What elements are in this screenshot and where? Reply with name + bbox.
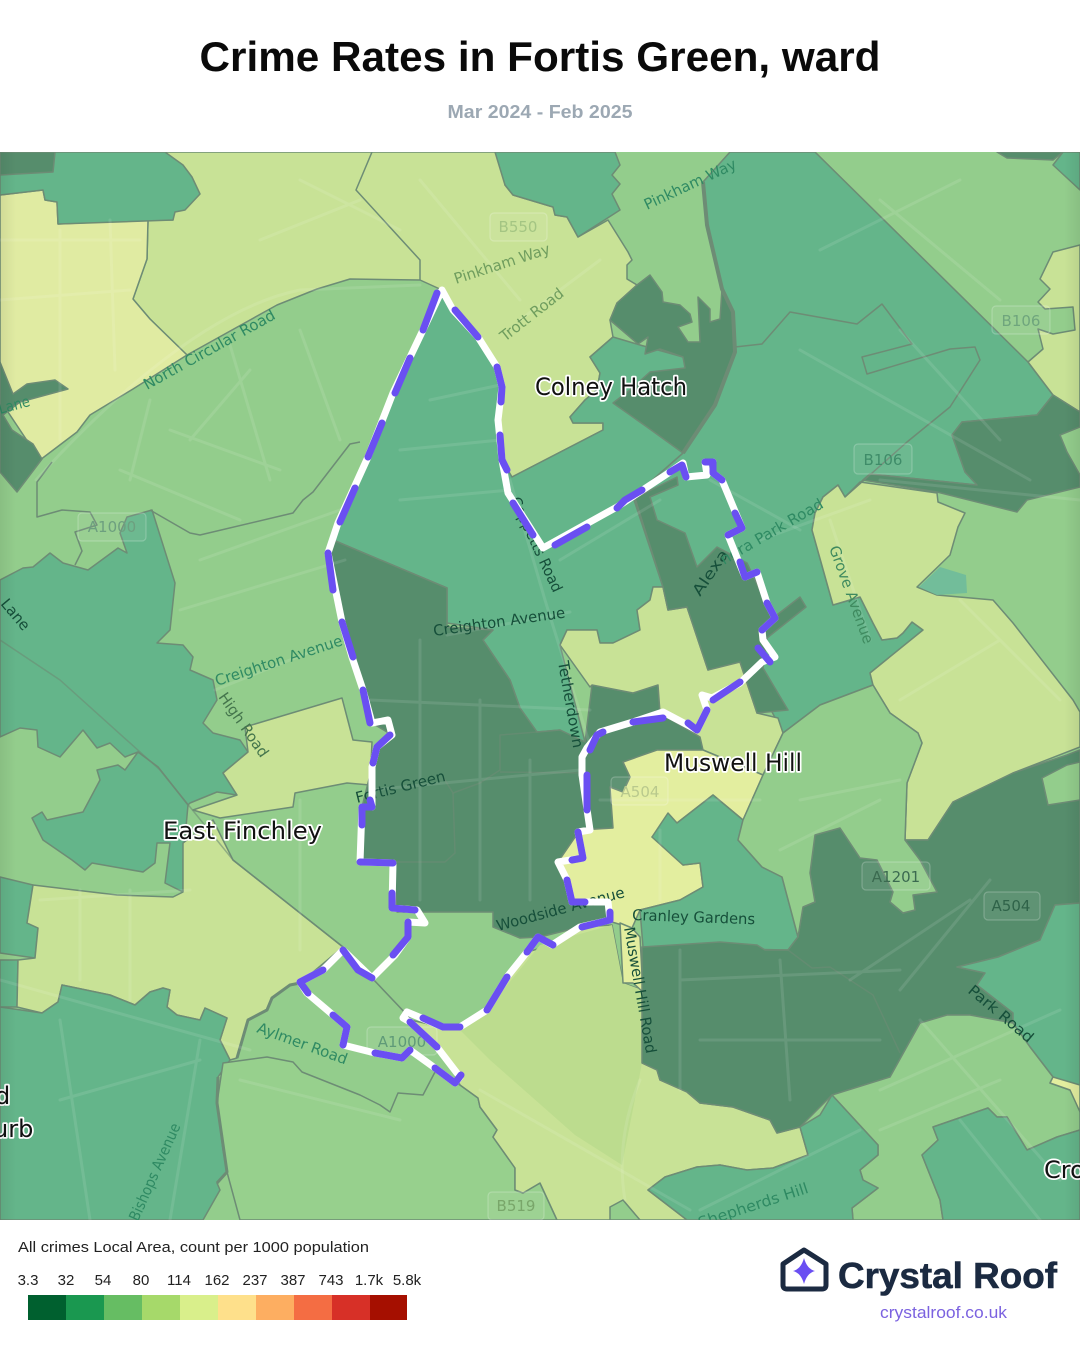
legend scale labels: 54 [95,1272,111,1289]
road number shields: B550 [499,218,537,236]
park and open space south of ward [410,925,808,1220]
road labels: Aylmer Road [255,1019,350,1068]
road labels: Trott Road [496,284,567,346]
place labels: Colney Hatch [535,373,687,401]
road labels: Pinkham Way [452,240,552,288]
road network [0,180,1080,1220]
inner neighbourhood borders [0,152,980,1183]
subtitle: date range: Mar 2024 - Feb 2025 [448,102,632,122]
road number shields: A1000 [88,518,136,536]
icon: Crystal Roof house logo [783,1250,826,1289]
road labels: Grove Avenue [825,543,877,646]
road labels: Pinkham Way [641,155,739,214]
road number shields: B106 [1002,312,1040,330]
dark area: Colney Hatch [610,275,735,453]
place labels: East Finchley [163,817,322,845]
legend scale labels [18,1272,422,1289]
ward boundary: purple dashes [300,293,775,1083]
darkest area: Fortis Green south [328,540,703,938]
legend scale labels: 32 [58,1272,74,1289]
road number shields: A504 [621,783,659,801]
west medium areas [0,510,248,805]
road labels: Alexa [688,546,732,599]
yellow-green area: east open space [812,482,1080,840]
road labels: Woodside Avenue [494,883,627,935]
road labels: North Circular Road [140,306,278,393]
road labels: Shepherds Hill [696,1179,811,1232]
map areas: crime rate neighbourhoods [0,152,1080,1220]
legend scale labels: 5.8k [393,1272,422,1289]
road labels: Cranley Gardens [632,906,756,928]
road labels [0,155,1037,1232]
title: Crime Rates in Fortis Green, ward [200,33,880,80]
pale yellow area: Muswell Hill centre [558,750,763,928]
yellow-green area west of Alexandra Park [560,587,783,775]
legend colour ramp [28,1295,407,1320]
place labels: Muswell Hill [664,749,802,777]
dark area: south east [642,750,1080,1133]
legend scale labels: 387 [280,1272,306,1289]
place labels [0,373,1080,1184]
road labels: Creighton Avenue [213,632,345,690]
road number shields: A504 [992,897,1030,915]
brand name: Crystal Roof [838,1255,1058,1296]
road number shields: B519 [497,1197,535,1215]
road labels: High Road [215,689,272,761]
road labels: Fortis Green [354,767,447,807]
road labels: Park Road [964,981,1037,1046]
road labels: Creighton Avenue [432,604,566,640]
medium area across north of ward [333,290,700,742]
road labels: Coppetts Road [506,494,566,595]
legend scale labels: 162 [204,1272,230,1289]
legend scale labels: 80 [133,1272,149,1289]
road labels: ndra Park Road [717,495,826,568]
choropleth map panel [0,152,1080,1232]
legend heading: All crimes Local Area, count per 1000 population [18,1239,369,1256]
road labels: Tetherdown [554,659,587,749]
legend scale labels: 237 [242,1272,268,1289]
legend scale labels: 114 [167,1272,191,1289]
road number shields: B106 [864,451,902,469]
road number shields [78,213,1050,1220]
road labels: Muswell Hill Road [620,926,660,1055]
road labels: Bishops Avenue [125,1120,184,1224]
ward boundary: white casing [300,290,775,1083]
road number shields: A1201 [872,868,920,886]
brand url: crystalroof.co.uk [880,1304,1008,1322]
road number shields: A1000 [378,1033,426,1051]
legend scale labels: 3.3 [18,1272,38,1289]
legend scale labels: 1.7k [355,1272,384,1289]
legend scale labels: 743 [318,1272,344,1289]
